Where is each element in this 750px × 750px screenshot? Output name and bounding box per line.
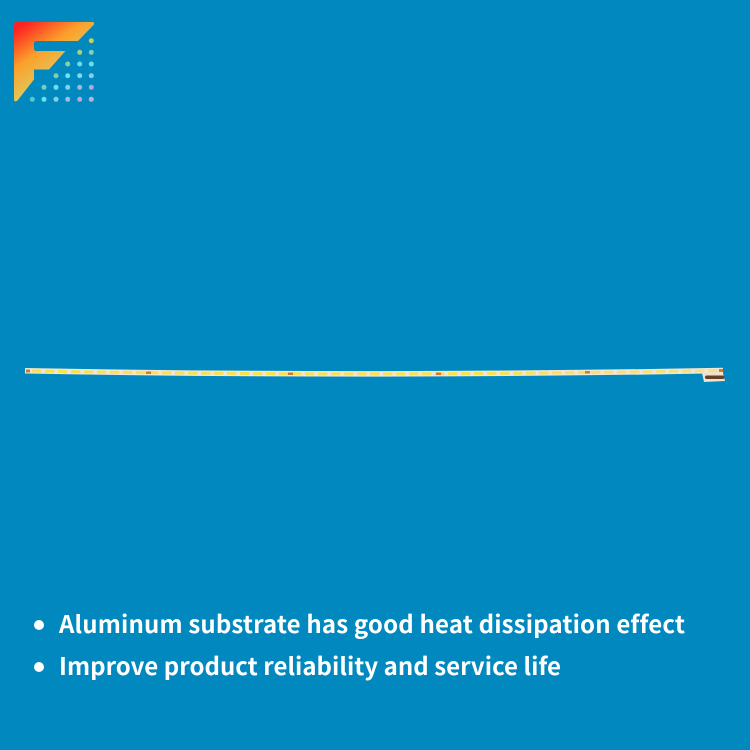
strip: aluminum substrate (25, 370, 723, 374)
logo: letter F (14, 22, 94, 101)
logo: dot grid (30, 38, 94, 102)
logo (14, 22, 94, 102)
LED strip (25, 369, 725, 382)
bullet 2 (34, 662, 44, 672)
strip: orange markers (26, 369, 723, 375)
strip: LED row (32, 370, 722, 374)
text: heat dissipation: Aluminum substrate has good heat dissipation effect (58, 605, 685, 640)
strip: connector (705, 376, 724, 379)
bullet 1 (34, 620, 44, 630)
bullet list (34, 605, 685, 682)
strip: connector tab (702, 373, 725, 382)
text: reliability: Improve product reliability and service life (59, 647, 561, 682)
